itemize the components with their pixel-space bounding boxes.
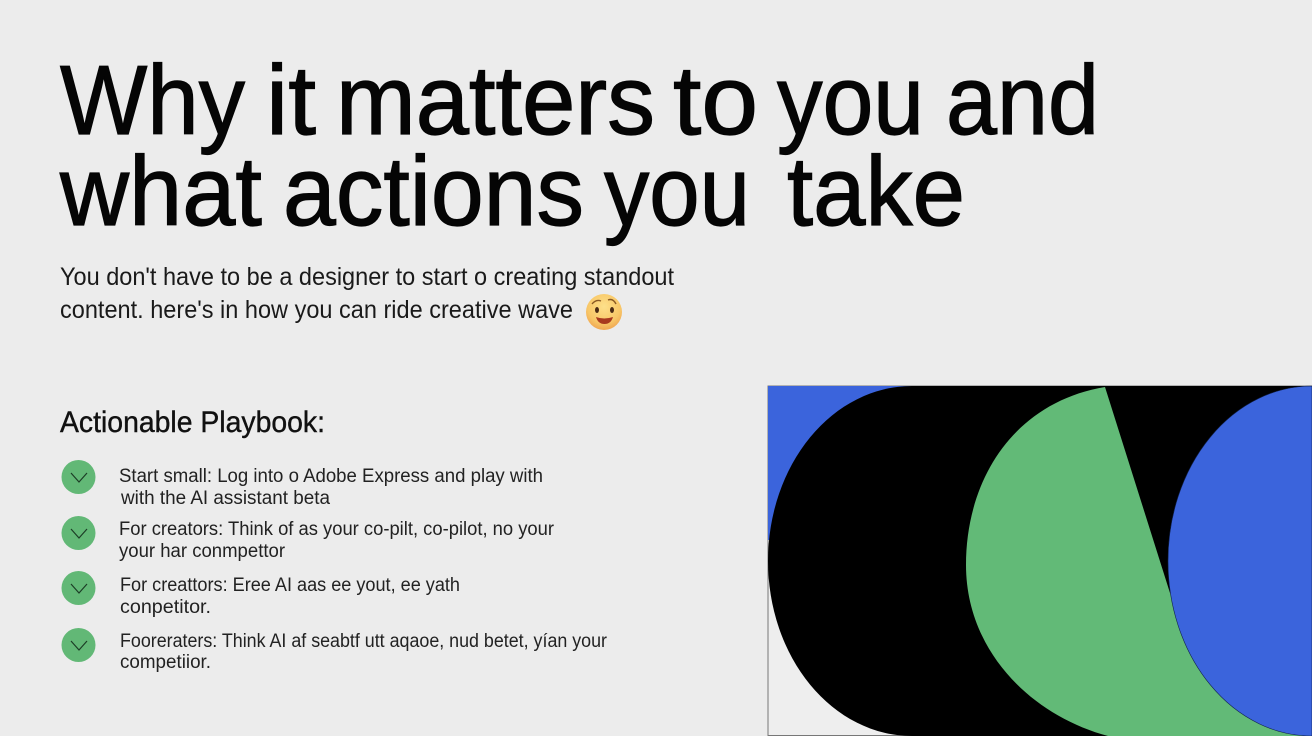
title: Why <box>60 45 245 155</box>
green shape <box>966 387 1312 736</box>
icon: smiling emoji <box>586 294 622 330</box>
title: you <box>777 45 924 155</box>
item 3 <box>62 571 460 618</box>
title: to <box>673 45 758 155</box>
item 4 <box>62 628 608 673</box>
item 1: Start small: Log into o Adobe Express and play with <box>119 466 543 487</box>
title: what <box>59 136 262 246</box>
title: take <box>787 136 965 246</box>
title: it <box>266 45 316 155</box>
item 4: Fooreraters: Think AI af seabtf utt aqaoe, nud betet, yían your <box>120 631 608 652</box>
title <box>59 45 1099 246</box>
subtitle: content. here's in how you can ride creative wave <box>60 296 573 324</box>
item 3: For creattors: Eree AI aas ee yout, ee yath <box>120 575 460 596</box>
item 1 <box>62 460 543 509</box>
panel: abstract geometric shapes <box>768 386 1312 736</box>
item 4: competiior. <box>120 652 211 673</box>
item 2: your har conmpettor <box>119 541 286 562</box>
item 3: conpetitor. <box>120 597 211 618</box>
black rounded shape <box>768 386 1312 736</box>
panel background <box>768 386 1312 736</box>
blue circle <box>1168 386 1312 736</box>
item 2 <box>62 516 555 562</box>
subtitle: You don't have to be a designer to start o creating standout <box>60 263 674 291</box>
item 1: with the AI assistant beta <box>120 488 330 509</box>
checklist <box>62 460 608 673</box>
heading: Actionable Playbook: Actionable Playbook: <box>60 406 325 439</box>
subtitle <box>60 263 674 324</box>
title: and <box>946 45 1099 155</box>
title: matters <box>336 45 655 155</box>
title: you <box>604 136 750 246</box>
title: actions <box>283 136 584 246</box>
item 2: For creators: Think of as your co-pilt, co-pilot, no your <box>119 519 555 540</box>
blue corner <box>768 386 915 540</box>
